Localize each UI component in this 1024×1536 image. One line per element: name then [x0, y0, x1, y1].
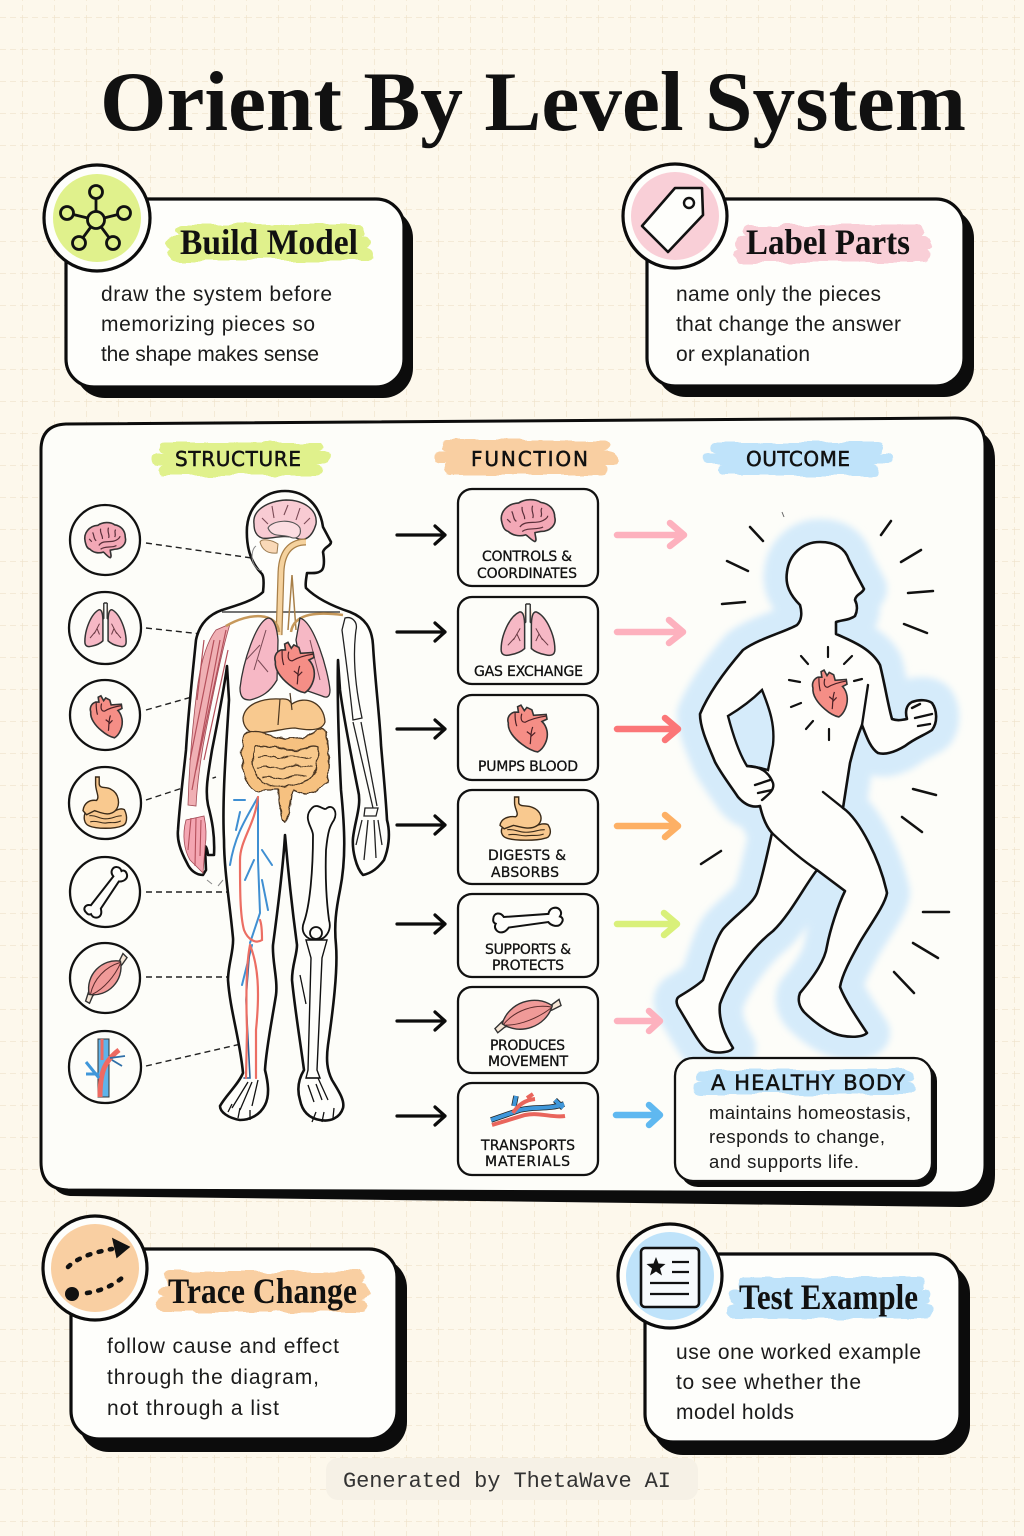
- heading: OUTCOME: OUTCOME: [746, 447, 850, 471]
- leader lines: [146, 543, 273, 1066]
- text: Trace Change description: [107, 1335, 339, 1420]
- text: Build Model description: the shape makes sense: [101, 343, 319, 366]
- callout: a healthy body: maintains homeostasis,: [709, 1102, 911, 1123]
- text: Label Parts description: that change the answer: [676, 313, 901, 336]
- callout: a healthy body: A HEALTHY BODY: [711, 1071, 905, 1095]
- heading: FUNCTION: [440, 446, 614, 471]
- icon: bone circle: [70, 857, 140, 927]
- text: Label Parts description: [676, 283, 901, 366]
- function: supports and protects: SUPPORTS &: [485, 942, 571, 958]
- heart rays: [789, 647, 862, 740]
- icon: tag: [623, 164, 727, 268]
- function: digests and absorbs: DIGESTS &: [488, 848, 566, 864]
- body outline: [178, 491, 389, 1120]
- brain and spinal cord: [226, 500, 343, 635]
- panel: Build Model: [44, 165, 413, 398]
- function: digests and absorbs: ABSORBS: [491, 865, 559, 881]
- function: controls and coordinates: [458, 489, 598, 586]
- panel: main diagram: [41, 418, 995, 1207]
- callout: a healthy body: and supports life.: [709, 1151, 859, 1172]
- text: Trace Change description: follow cause and effect: [107, 1335, 339, 1358]
- callout: a healthy body: [675, 1058, 937, 1187]
- text: Build Model description: [101, 283, 332, 366]
- icon: lungs circle: [69, 592, 141, 664]
- heading: OUTCOME: [708, 447, 888, 471]
- icon: dotted path arrow: [43, 1216, 147, 1320]
- ear and faint leader details: [207, 546, 262, 886]
- coloured arrows: [616, 523, 684, 1125]
- heading: FUNCTION: FUNCTION: [471, 447, 588, 471]
- leg bones: [228, 806, 335, 1122]
- heading: Build Model: Build Model: [180, 222, 358, 262]
- function: gas exchange: [458, 597, 598, 684]
- icon: example card: [618, 1224, 722, 1328]
- function: produces movement: PRODUCES: [490, 1038, 565, 1054]
- panel: Label Parts: [623, 164, 974, 397]
- text: Trace Change description: through the diagram,: [107, 1366, 319, 1389]
- arm and shoulder bones: [222, 612, 382, 860]
- function: transports materials: TRANSPORTS: [480, 1138, 575, 1154]
- function: supports and protects: [458, 894, 598, 977]
- energy rays: [701, 521, 949, 993]
- running figure: [677, 512, 949, 1052]
- function: pumps blood: [458, 695, 598, 780]
- panel: Trace Change: [43, 1216, 407, 1452]
- text: Label Parts description: or explanation: [676, 343, 810, 366]
- leg vessels: [230, 797, 272, 1078]
- text: Label Parts description: name only the pieces: [676, 283, 881, 306]
- function: digests and absorbs: [458, 790, 598, 884]
- function: transports materials: MATERIALS: [485, 1154, 570, 1170]
- text: Test Example description: to see whether the: [676, 1371, 861, 1394]
- function: supports and protects: PROTECTS: [492, 958, 564, 974]
- icon: heart circle: [70, 680, 140, 750]
- digestive organs: [242, 693, 329, 822]
- icon: brain circle: [70, 505, 140, 575]
- function: gas exchange: GAS EXCHANGE: [474, 664, 583, 680]
- function: transports materials: [458, 1083, 598, 1175]
- callout: a healthy body: responds to change,: [709, 1126, 885, 1147]
- footer credit: [326, 1458, 698, 1500]
- footer credit: Generated by ThetaWave AI: [343, 1469, 671, 1494]
- icon: stomach circle: [69, 767, 141, 839]
- function: controls and coordinates: COORDINATES: [477, 566, 577, 582]
- body diagram: [178, 491, 389, 1122]
- icon: network model: [44, 165, 150, 271]
- lungs in torso: [240, 618, 330, 700]
- panel: Test Example: [618, 1224, 970, 1455]
- heading: Trace Change: Trace Change: [168, 1271, 357, 1311]
- function: controls and coordinates: CONTROLS &: [482, 549, 572, 565]
- title: Orient By Level System: [100, 55, 966, 149]
- function: produces movement: [458, 987, 598, 1073]
- icon: muscle circle: [70, 943, 140, 1013]
- black arrows: [397, 526, 445, 1125]
- text: Build Model description: memorizing pieces so: [101, 313, 315, 336]
- text: Trace Change description: not through a list: [107, 1397, 279, 1420]
- text: Build Model description: draw the system before: [101, 283, 332, 306]
- function: pumps blood: PUMPS BLOOD: [478, 759, 578, 775]
- arm muscles: [184, 624, 230, 873]
- heading: STRUCTURE: STRUCTURE: [175, 447, 301, 471]
- text: Test Example description: use one worked example: [676, 1341, 921, 1364]
- function: produces movement: MOVEMENT: [488, 1054, 568, 1070]
- text: Test Example description: [676, 1341, 921, 1424]
- text: Test Example description: model holds: [676, 1401, 794, 1424]
- heading: Test Example: Test Example: [739, 1277, 918, 1317]
- heading: Label Parts: Label Parts: [746, 222, 910, 262]
- icon: vessels circle: [69, 1031, 141, 1103]
